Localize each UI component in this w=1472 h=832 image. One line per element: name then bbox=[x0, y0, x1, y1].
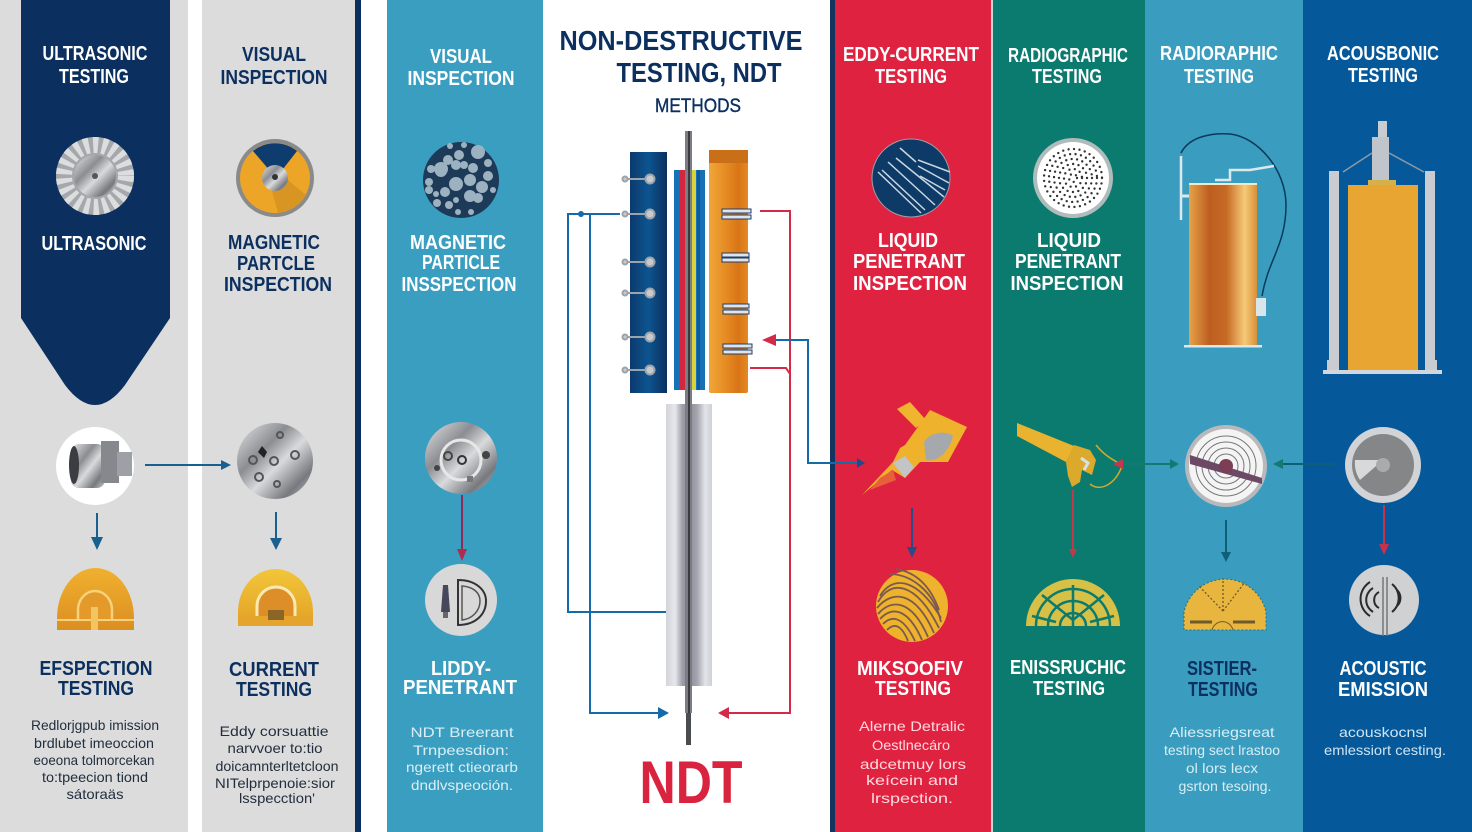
heading: liquid penetrant inspection bbox=[853, 230, 967, 295]
title: METHODS bbox=[655, 96, 741, 117]
icon: bright gold arch bbox=[238, 569, 313, 626]
icon: gauge symbol bbox=[425, 564, 497, 636]
heading: liddy penetrant: PENETRANT bbox=[403, 677, 517, 699]
diagram: layered core bbox=[674, 170, 705, 390]
heading: visual inspection bbox=[220, 44, 328, 89]
text: penetrant description: ngerett ctieorarb bbox=[406, 759, 518, 775]
icon: yellow tank in frame bbox=[1323, 121, 1442, 374]
icon: gauge dome bbox=[1184, 578, 1266, 630]
heading: liquid penetrant inspection: LIQUID bbox=[878, 230, 938, 252]
panel: ultrasonic testing bbox=[0, 0, 188, 832]
icon: yellow probe bbox=[1017, 423, 1122, 487]
icon: cracked navy disk bbox=[872, 139, 950, 217]
icon: steel disk with holes bbox=[425, 422, 497, 494]
icon: metal particles bbox=[423, 142, 499, 218]
heading: current testing bbox=[229, 659, 319, 701]
title: TESTING, NDT bbox=[616, 57, 782, 88]
diagram: lower silver cylinder bbox=[666, 404, 712, 686]
heading: liquid penetrant inspection: PENETRANT bbox=[853, 251, 965, 273]
heading: magnetic testing: TESTING bbox=[875, 678, 951, 700]
text: radiographic description: Aliessriegsreat bbox=[1170, 724, 1275, 740]
icon: yellow disk with fingerprint lines bbox=[876, 569, 948, 642]
connector arrow: center column to eddy-current panel bbox=[762, 334, 865, 468]
text: penetrant description bbox=[406, 724, 518, 793]
label: ultrasonic: ULTRASONIC bbox=[42, 233, 146, 255]
text: eddy-current description: keícein and bbox=[866, 772, 958, 788]
icon: dotted white disk bbox=[1033, 138, 1113, 218]
heading: magnetic testing: MIKSOOFIV bbox=[857, 658, 964, 680]
icon: steel disk bbox=[237, 423, 313, 499]
text: acoustic description: emlessiort cesting. bbox=[1324, 742, 1446, 758]
heading: magnetic particle inspection: INSPECTION bbox=[224, 274, 332, 296]
title: NON-DESTRUCTIVE bbox=[560, 25, 802, 56]
heading: inspection testing bbox=[40, 658, 152, 700]
heading: visual inspection: INSPECTION bbox=[408, 68, 514, 90]
icon: gear dome bbox=[1026, 579, 1120, 626]
arrow: down bbox=[91, 513, 103, 550]
text: ultrasonic description bbox=[31, 717, 159, 802]
heading: eddy-current testing: EDDY-CURRENT bbox=[843, 44, 979, 66]
arrow: down bbox=[1379, 505, 1389, 555]
panel: radiographic testing blue bbox=[1145, 0, 1303, 832]
connector lines: blue bbox=[568, 211, 677, 719]
heading: magnetic testing bbox=[857, 658, 964, 700]
heading: radiographic testing: TESTING bbox=[1184, 66, 1254, 88]
heading: sister testing bbox=[1187, 658, 1258, 701]
heading: acoustic testing bbox=[1327, 43, 1439, 87]
text: radiographic description: gsrton tesoing. bbox=[1178, 778, 1272, 794]
text: eddy current description: doicamnterltetcloon bbox=[216, 758, 338, 774]
heading: emission testing: ENISSRUCHIC bbox=[1010, 657, 1126, 679]
panel: radiographic testing green bbox=[991, 0, 1145, 832]
heading: magnetic particle inspection: INSSPECTION bbox=[402, 274, 516, 296]
heading: radiographic testing: TESTING bbox=[1032, 66, 1102, 88]
text: eddy current description: Eddy corsuattie bbox=[220, 723, 329, 739]
heading: liquid penetrant inspection bbox=[1010, 230, 1124, 295]
heading: acoustic emission: EMISSION bbox=[1338, 679, 1428, 701]
heading: ultrasonic testing bbox=[42, 43, 148, 88]
text: radiographic description: testing sect lrastoo bbox=[1164, 742, 1280, 758]
heading: liddy penetrant bbox=[403, 658, 517, 699]
label: NDT: NDT bbox=[640, 749, 742, 816]
heading: inspection testing: TESTING bbox=[58, 678, 134, 700]
text: radiographic description: ol lors lecx bbox=[1186, 760, 1258, 776]
heading: eddy-current testing: TESTING bbox=[875, 66, 947, 88]
text: eddy-current description: Alerne Detralic bbox=[859, 718, 965, 734]
text: eddy-current description: lrspection. bbox=[871, 790, 953, 806]
diagram: orange clamped column bbox=[709, 150, 752, 393]
heading: eddy-current testing bbox=[843, 44, 979, 88]
heading: magnetic particle inspection: MAGNETIC bbox=[228, 232, 320, 254]
heading: ultrasonic testing: TESTING bbox=[59, 66, 129, 88]
panel: visual inspection blue bbox=[387, 0, 543, 832]
text: eddy-current description: adcetmuy lors bbox=[860, 756, 966, 772]
diagram: blue bolted column bbox=[622, 152, 667, 393]
heading: visual inspection: VISUAL bbox=[242, 44, 306, 66]
heading: visual inspection: VISUAL bbox=[430, 46, 492, 68]
heading: emission testing bbox=[1010, 657, 1126, 700]
banner: navy pennant bbox=[21, 0, 170, 405]
heading: sister testing: SISTIER- bbox=[1187, 658, 1257, 680]
heading: current testing: CURRENT bbox=[229, 659, 319, 681]
heading: liddy penetrant: LIDDY- bbox=[431, 658, 491, 680]
icon: concentric wave disk bbox=[1185, 425, 1267, 507]
connector lines: red bbox=[718, 211, 790, 719]
text: penetrant description: dndlvspeoción. bbox=[411, 777, 513, 793]
heading: liquid penetrant inspection: INSPECTION bbox=[1010, 273, 1124, 295]
icon: metal fitting bbox=[56, 427, 134, 505]
heading: acoustic emission bbox=[1338, 658, 1428, 701]
text: radiographic description bbox=[1164, 724, 1280, 794]
arrow: down bbox=[907, 508, 917, 558]
heading: magnetic particle inspection: MAGNETIC bbox=[410, 232, 506, 254]
text: ultrasonic description: eoeona tolmorcekan bbox=[34, 752, 154, 768]
heading: inspection testing: EFSPECTION bbox=[40, 658, 152, 680]
heading: acoustic emission: ACOUSTIC bbox=[1340, 658, 1426, 680]
heading: magnetic particle inspection: PARTICLE bbox=[422, 252, 500, 274]
text: penetrant description: Trnpeesdion: bbox=[413, 742, 509, 758]
heading: current testing: TESTING bbox=[236, 679, 312, 701]
icon: copper tank with cable bbox=[1181, 134, 1286, 348]
heading: visual inspection bbox=[408, 46, 514, 90]
heading: sister testing: TESTING bbox=[1188, 679, 1258, 701]
diagram: central rod bbox=[685, 131, 692, 745]
title bbox=[560, 25, 802, 117]
heading: emission testing: TESTING bbox=[1033, 678, 1105, 700]
arrow: down bbox=[270, 512, 282, 550]
divider: navy strip bbox=[355, 0, 361, 832]
heading: liquid penetrant inspection: INSPECTION bbox=[853, 273, 967, 295]
text: ultrasonic description: to:tpeecion tiond bbox=[42, 769, 148, 785]
text: eddy-current description: Oestlnecáro bbox=[872, 737, 950, 753]
heading: magnetic particle inspection bbox=[224, 232, 332, 296]
text: ultrasonic description: sátoraäs bbox=[66, 786, 124, 802]
heading: visual inspection: INSPECTION bbox=[220, 67, 328, 89]
heading: radiographic testing: RADIORAPHIC bbox=[1160, 43, 1278, 65]
text: penetrant description: NDT Breerant bbox=[410, 724, 514, 740]
icon: yellow and navy wheel bbox=[236, 139, 314, 217]
panel: center NDT diagram bbox=[543, 0, 830, 832]
heading: radiographic testing bbox=[1160, 43, 1278, 88]
heading: ultrasonic testing: ULTRASONIC bbox=[42, 43, 148, 65]
text: ultrasonic description: brdlubet imeoccion bbox=[34, 735, 154, 751]
arrow: down bbox=[1069, 490, 1077, 558]
heading: acoustic testing: ACOUSBONIC bbox=[1327, 43, 1439, 65]
text: eddy current description bbox=[215, 723, 338, 806]
heading: radiographic testing: RADIOGRAPHIC bbox=[1008, 45, 1128, 67]
text: acoustic description bbox=[1324, 724, 1446, 758]
text: eddy current description: lsspecction' bbox=[239, 790, 315, 806]
heading: liquid penetrant inspection: PENETRANT bbox=[1015, 251, 1121, 273]
heading: magnetic particle inspection: PARTCLE bbox=[237, 253, 315, 275]
panel: eddy-current testing bbox=[830, 0, 991, 832]
arrow: down bbox=[457, 495, 467, 561]
heading: liquid penetrant inspection: LIQUID bbox=[1037, 230, 1101, 252]
text: ultrasonic description: Redlorjgpub imission bbox=[31, 717, 159, 733]
icon: sound wave circle bbox=[1349, 565, 1419, 636]
icon: grey acoustic disk bbox=[1345, 427, 1421, 503]
text: eddy-current description bbox=[859, 718, 966, 806]
heading: acoustic testing: TESTING bbox=[1348, 65, 1418, 87]
panel: visual inspection grey bbox=[202, 0, 361, 832]
text: acoustic description: acouskocnsl bbox=[1339, 724, 1427, 740]
heading: magnetic particle inspection bbox=[402, 232, 516, 296]
arrow: probe to wave disk bbox=[1113, 459, 1179, 469]
arrow: acoustic disk to wave disk bbox=[1273, 459, 1333, 469]
text: eddy current description: NITelprpenoie:sior bbox=[215, 775, 335, 791]
icon: gold arch bbox=[57, 568, 134, 630]
text: eddy current description: narvvoer to:tio bbox=[228, 740, 323, 756]
arrow: down bbox=[1221, 520, 1231, 562]
heading: radiographic testing bbox=[1008, 45, 1128, 88]
arrow: ultrasonic fitting to steel disk bbox=[145, 460, 231, 470]
icon: fan disk bbox=[56, 137, 134, 215]
icon: yellow spray tool bbox=[862, 402, 967, 495]
panel: acoustic emission bbox=[1303, 0, 1472, 832]
